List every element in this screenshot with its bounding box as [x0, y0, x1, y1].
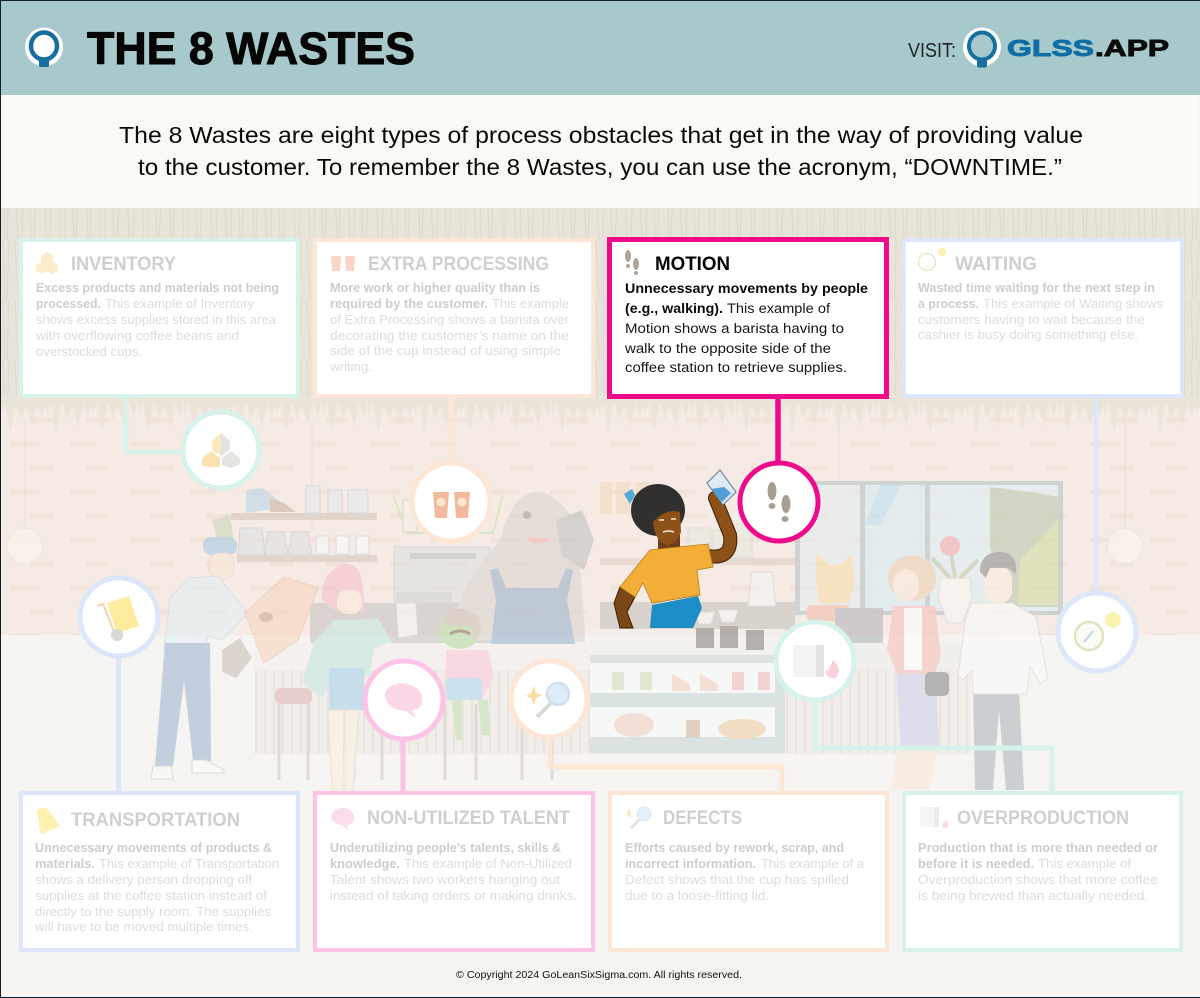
hanging lamp left: [7, 420, 839, 564]
icon: hand truck small: [37, 807, 60, 834]
text block: overproduction: This example of: [1038, 857, 1132, 871]
icon: logo bulb: [25, 28, 63, 67]
frog mascot: [439, 609, 494, 740]
text block: transportation: supplies at the coffee station instead of: [35, 889, 268, 903]
text block: inventory: shows excess supplies stored in this area: [36, 313, 276, 327]
connector: extra processing: [448, 398, 454, 464]
heading: defects: DEFECTS: [663, 808, 742, 829]
header bar: [0, 0, 1200, 95]
connector: non-utilized talent: [400, 740, 406, 792]
intro text: The 8 Wastes are eight types of process obstacles that get in the way of providing value: [119, 122, 1083, 148]
text block: transportation: [34, 841, 279, 934]
thatched roof: [0, 208, 1200, 398]
heading: extra processing: EXTRA PROCESSING: [368, 254, 549, 275]
heading: motion: MOTION: [655, 254, 730, 275]
barista raised arm: [708, 498, 730, 557]
text block: extra processing: side of the cup instead of using simple: [330, 344, 561, 358]
panel: waiting: [904, 240, 1182, 396]
text block: non-utilized talent: instead of taking orders or making drinks.: [330, 889, 577, 903]
connector: transportation: [116, 655, 121, 792]
window: [795, 481, 1063, 615]
panel: overproduction: [904, 793, 1181, 950]
text block: overproduction: Overproduction shows that more coffee: [918, 873, 1158, 887]
text block: transportation: shows a delivery person dropping off: [35, 873, 253, 887]
thatch fringe: [0, 396, 1200, 434]
text block: motion: Motion shows a barista having to: [625, 321, 844, 336]
text block: transportation: materials.: [35, 857, 95, 871]
text block: motion: walk to the opposite side of the: [624, 341, 831, 356]
waiting customer man: [958, 552, 1048, 790]
scene: coffee shop background: [0, 208, 1200, 998]
icon: clock small: [918, 248, 946, 270]
connector: waiting: [1094, 398, 1098, 596]
icon: glss logo bulb: [963, 28, 1001, 68]
text block: overproduction: [918, 841, 1158, 903]
barista lowered arm: [614, 587, 635, 628]
text block: extra processing: writing.: [329, 360, 372, 374]
text block: extra processing: required by the customer.: [330, 297, 488, 311]
visit label: VISIT:: [908, 40, 956, 62]
icon: magnifier small: [626, 807, 651, 828]
heading: inventory: INVENTORY: [71, 254, 176, 275]
text block: motion: This example of: [727, 301, 830, 316]
hanging lamp right: [1107, 420, 1143, 564]
text block: defects: Efforts caused by rework, scrap, and: [625, 841, 844, 855]
butterfly clip: [624, 489, 635, 504]
circle icon: motion footprints: [740, 463, 818, 541]
barista afro: [631, 484, 685, 536]
milk carton label: [711, 487, 731, 502]
cat mascot cashier: [807, 553, 883, 643]
text block: extra processing: [329, 281, 569, 374]
text block: defects: Defect shows that the cup has spilled: [625, 873, 849, 887]
heading: waiting: WAITING: [955, 254, 1037, 275]
connector: overproduction: [815, 700, 1052, 792]
brick wall: [0, 395, 1200, 635]
panel: inventory: [21, 240, 298, 396]
barista apron: [650, 596, 702, 628]
faded illustration of staff and customers: [7, 420, 1143, 790]
text block: inventory: Excess products and materials not being: [36, 281, 279, 295]
text block: transportation: Unnecessary movements of products &: [35, 841, 272, 855]
server girl: [302, 564, 392, 790]
text block: inventory: [35, 281, 279, 359]
circle icon: transportation hand truck: [80, 578, 158, 656]
glss.app wordmark: [1007, 35, 1169, 61]
seal barista mascot: [452, 492, 594, 644]
barista eyes and mouth: [659, 519, 676, 532]
text block: waiting: This example of Waiting shows: [983, 297, 1163, 311]
text block: extra processing: decorating the customer’s name on the: [330, 329, 569, 343]
glss.app wordmark: .APP: [1095, 35, 1169, 61]
connector: motion: [775, 398, 781, 466]
glss.app wordmark: GLSS: [1007, 35, 1094, 61]
text block: extra processing: More work or higher quality than is: [330, 281, 540, 295]
flower vase: [932, 536, 978, 623]
circle icon: inventory cubes: [183, 412, 259, 488]
text block: overproduction: is being brewed than actually needed.: [918, 889, 1148, 903]
intro text: to the customer. To remember the 8 Wastes, you can use the acronym, “DOWNTIME.”: [138, 154, 1062, 180]
counter with stools: [255, 643, 971, 780]
pastry display case: [590, 629, 785, 753]
heading: overproduction: OVERPRODUCTION: [957, 808, 1129, 829]
text block: waiting: customers having to wait because the: [918, 313, 1145, 327]
neon menu sign: [393, 495, 503, 533]
milk carton: [707, 470, 736, 505]
text block: inventory: processed.: [36, 297, 101, 311]
text block: transportation: This example of Transportation: [99, 857, 279, 871]
text block: transportation: will have to be moved multiple times.: [34, 920, 253, 934]
text block: overproduction: Production that is more than needed or: [918, 841, 1158, 855]
text block: transportation: directly to the supply room. The supplies: [35, 905, 271, 919]
text block: waiting: [918, 281, 1163, 342]
intro text: [119, 122, 1083, 180]
title: THE 8 WASTES: [87, 23, 415, 74]
text block: defects: [625, 841, 864, 903]
floor: [0, 635, 1200, 998]
barista raised arm outline: [708, 498, 730, 557]
text block: non-utilized talent: [330, 841, 577, 903]
text block: defects: due to a loose-fitting lid.: [625, 889, 769, 903]
barista face: [653, 511, 681, 545]
pour-over coffee carafes: [695, 610, 764, 650]
icon: brain small: [331, 808, 354, 830]
text block: extra processing: This example: [492, 297, 569, 311]
icon: cups and flame small: [920, 807, 948, 828]
connector: defects: [550, 736, 782, 792]
text block: non-utilized talent: Talent shows two workers hanging out: [330, 873, 561, 887]
text block: motion: (e.g., walking).: [625, 301, 723, 316]
text block: extra processing: of Extra Processing shows a barista over: [330, 313, 569, 327]
circle icon: non-utilized talent brain: [365, 661, 443, 739]
text block: motion: [624, 281, 869, 375]
espresso machine: [310, 547, 494, 643]
text block: motion: Unnecessary movements by people: [625, 281, 869, 296]
text block: waiting: a process.: [918, 297, 979, 311]
circle icon: defects magnifier: [511, 661, 587, 737]
text block: waiting: Wasted time waiting for the next step in: [918, 281, 1155, 295]
circle icon: extra processing cups: [412, 463, 490, 541]
panel: transportation: [21, 793, 298, 950]
heading: transportation: TRANSPORTATION: [71, 810, 240, 831]
heading: non-utilized talent: NON-UTILIZED TALENT: [367, 808, 570, 829]
text block: non-utilized talent: Underutilizing people’s talents, skills &: [330, 841, 561, 855]
back shelf and jars: [600, 482, 795, 630]
text block: inventory: overstocked cups.: [36, 345, 142, 359]
text block: defects: This example of a: [761, 857, 864, 871]
text block: non-utilized talent: This example of Non-Utilized: [404, 857, 572, 871]
barista neck: [658, 535, 680, 553]
panel: extra processing: [315, 240, 593, 396]
intro panel: [1, 95, 1199, 208]
waiting customer woman: [887, 555, 949, 790]
delivery person with coffee sack: [151, 537, 318, 779]
connector: inventory: [126, 398, 185, 452]
text block: overproduction: before it is needed.: [918, 857, 1034, 871]
icon: cups small: [331, 256, 355, 271]
panel: defects: [610, 793, 887, 950]
icon: cubes small: [36, 252, 58, 274]
barista shirt: [620, 544, 713, 603]
text block: motion: coffee station to retrieve supplies.: [625, 360, 847, 375]
panel: motion: [610, 240, 886, 396]
text block: waiting: cashier is busy doing something else.: [918, 328, 1138, 342]
circle icon: overproduction cups and flame: [776, 622, 854, 700]
text block: inventory: with overflowing coffee beans and: [35, 329, 239, 343]
left shelves with cups and kettles: [212, 486, 377, 562]
barista in focus: [614, 470, 736, 628]
text block: inventory: This example of Inventory: [105, 297, 255, 311]
circle icon: waiting clock: [1058, 593, 1136, 671]
panel: non-utilized talent: [315, 793, 593, 950]
icon: footprints small: [625, 250, 639, 275]
text block: defects: incorrect information.: [625, 857, 756, 871]
text block: non-utilized talent: knowledge.: [330, 857, 400, 871]
copyright: © Copyright 2024 GoLeanSixSigma.com. All rights reserved.: [456, 969, 742, 981]
